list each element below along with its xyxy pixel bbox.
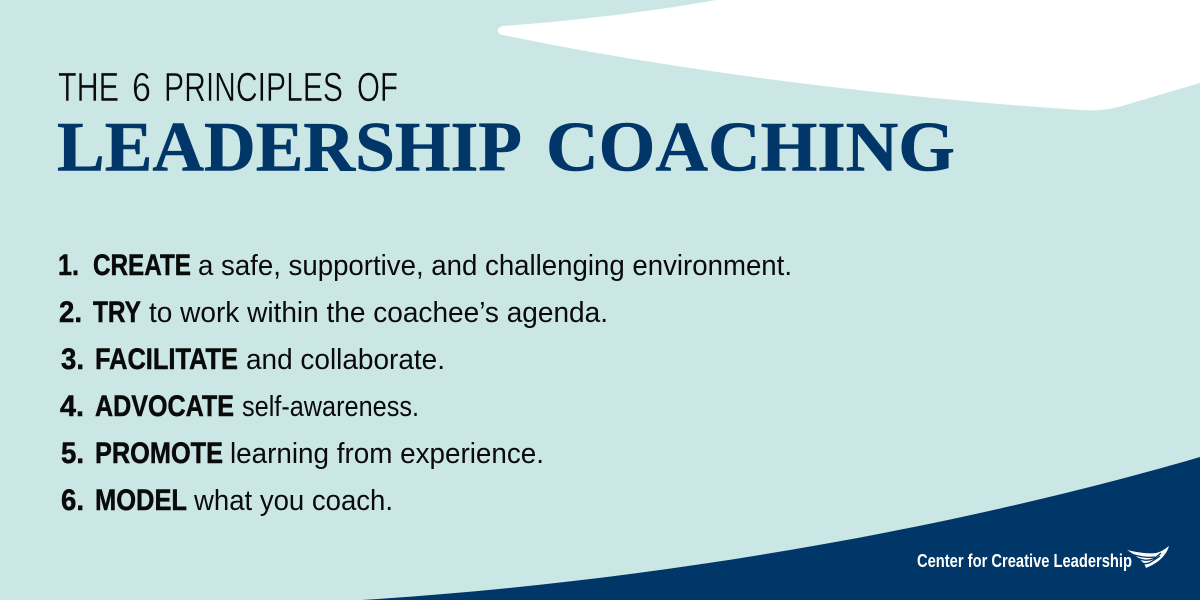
navy swoosh shape [362, 457, 1200, 600]
principle 1: CREATE [93, 249, 191, 282]
principles list [58, 249, 792, 517]
principle 2: 2. [59, 296, 82, 329]
title line: leadership coaching: COACHING [546, 108, 955, 186]
principle 3 [61, 343, 445, 376]
title line: the 6 principles of: 6 [132, 64, 151, 110]
title line: leadership coaching: LEADERSHIP [57, 108, 522, 186]
principle 5: 5. [61, 437, 84, 470]
title line: the 6 principles of [58, 64, 398, 110]
principle 5 [61, 437, 544, 470]
logo: center for creative leadership [917, 546, 1169, 571]
principle 4: self-awareness. [242, 391, 419, 423]
principle 6: 6. [61, 484, 84, 517]
white swoosh shape [498, 0, 1200, 110]
principle 6: MODEL [95, 484, 187, 517]
principle 3: 3. [61, 343, 84, 376]
icon: logo wing [1127, 546, 1169, 568]
principle 3: and collaborate. [246, 344, 445, 376]
principle 5: PROMOTE [95, 437, 223, 470]
title line: the 6 principles of: OF [357, 64, 398, 110]
principle 4: 4. [60, 390, 84, 423]
principle 1: 1. [58, 249, 79, 282]
principle 1: a safe, supportive, and challenging environment. [198, 250, 792, 282]
title line: leadership coaching [57, 108, 955, 186]
principle 6: what you coach. [193, 485, 393, 517]
title line: the 6 principles of: PRINCIPLES [164, 64, 343, 110]
logo wordmark: Center for Creative Leadership [917, 551, 1132, 571]
principle 2: to work within the coachee’s agenda. [149, 297, 608, 329]
principle 6 [61, 484, 393, 517]
principle 3: FACILITATE [95, 343, 238, 376]
principle 4: ADVOCATE [95, 390, 234, 423]
principle 2: TRY [93, 296, 141, 329]
principle 5: learning from experience. [230, 438, 544, 470]
title line: the 6 principles of: THE [58, 64, 119, 110]
principle 4 [60, 390, 419, 423]
